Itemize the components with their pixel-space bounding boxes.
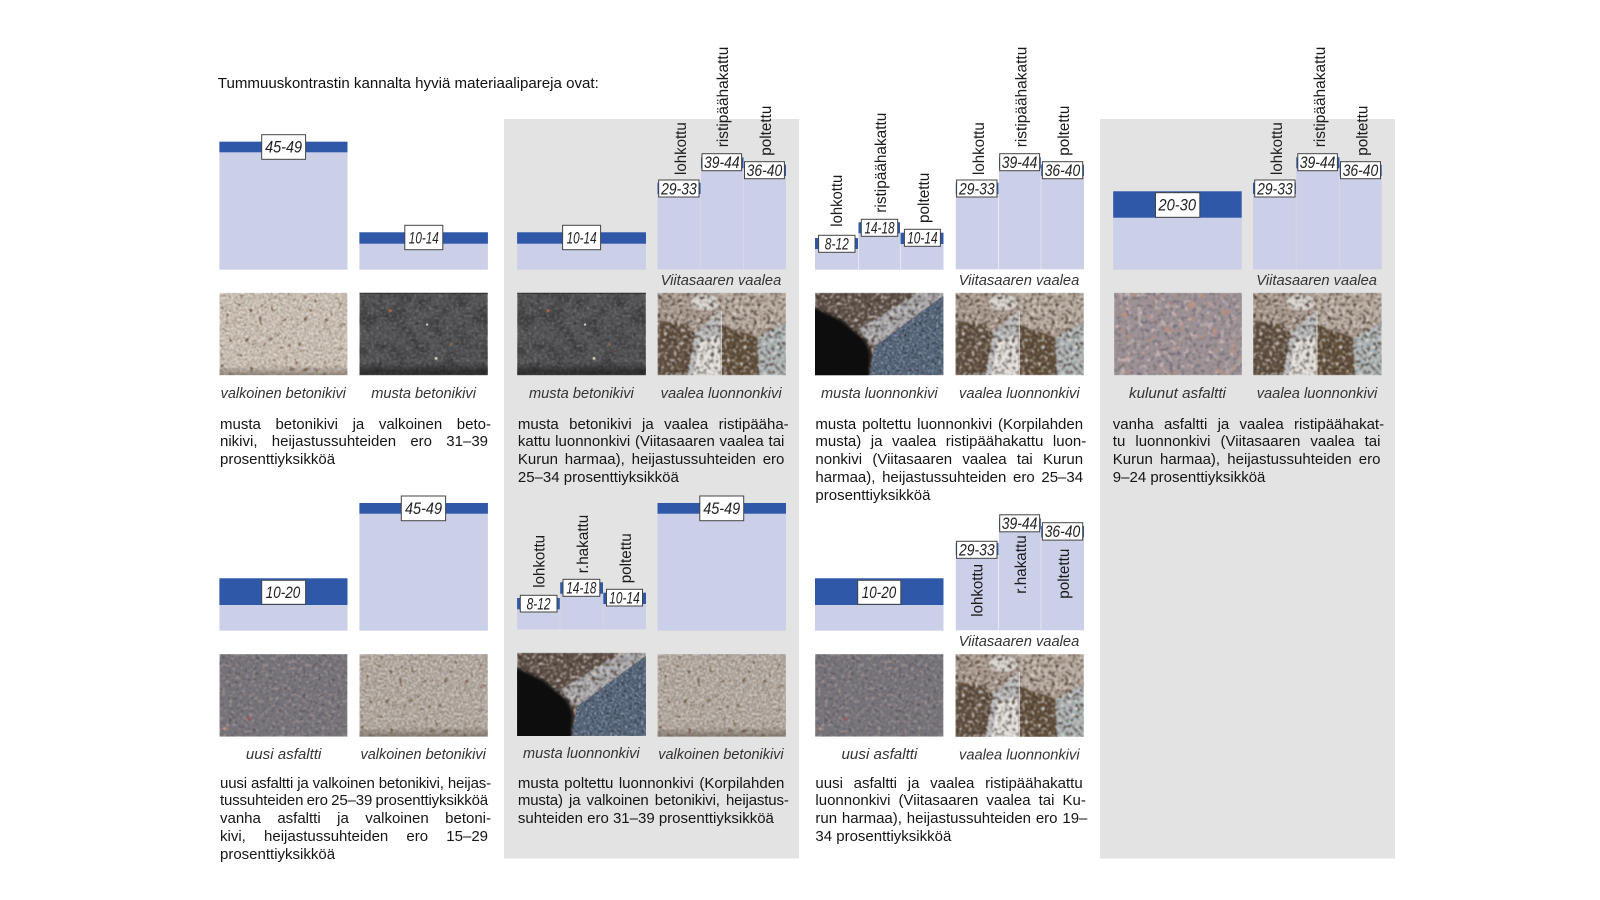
- bar: uusi asfaltti 10-20: 10-20: [266, 584, 301, 602]
- description: harmaa), heijastussuhteiden ero 25–34: [815, 469, 1083, 486]
- bars: Viitasaaren vaalea: 36-40: [1343, 162, 1379, 180]
- label: r.hakattu: r.hakattu: [1013, 535, 1030, 594]
- label: poltettu: poltettu: [1056, 549, 1073, 599]
- description: [220, 774, 496, 866]
- label: lohkottu: lohkottu: [532, 535, 548, 588]
- label: poltettu: poltettu: [1354, 106, 1372, 156]
- bars: musta luonnonkivi: 10-14: [907, 230, 938, 248]
- caption: musta luonnonkivi: musta luonnonkivi: [821, 385, 938, 402]
- description: musta poltettu luonnonkivi (Korpilahden: [815, 416, 1083, 432]
- description: kivi, heijastussuhteiden ero 15–29: [220, 828, 488, 845]
- bars: Viitasaaren vaalea: 39-44: [704, 154, 740, 172]
- bar: uusi asfaltti 10-20: [815, 578, 944, 631]
- caption: musta luonnonkivi: musta luonnonkivi: [523, 745, 640, 762]
- panel: grey column 4 background: [1100, 119, 1395, 858]
- description: suhteiden ero 31–39 prosenttiyksikköä: [518, 810, 774, 827]
- photo: musta luonnonkivi: [809, 293, 944, 382]
- label: lohkottu: lohkottu: [673, 122, 690, 175]
- description: prosenttiyksikköä: [815, 487, 930, 504]
- bars: musta luonnonkivi: 8-12: [825, 236, 849, 254]
- photo: kulunut asfaltti: [1114, 293, 1242, 375]
- caption: vaalea luonnonkivi: vaalea luonnonkivi: [959, 746, 1080, 764]
- bars: Viitasaaren vaalea: 36-40: [1045, 162, 1081, 180]
- bar: valkoinen betonikivi 45-49: [658, 496, 786, 631]
- bar: musta betonikivi 10-14: [517, 225, 646, 270]
- bars: Viitasaaren vaalea: [956, 515, 1084, 630]
- title: Tummuuskontrastin kannalta hyviä materiaalipareja ovat:: [218, 75, 599, 92]
- description: run harmaa), heijastussuhteiden ero 19–: [815, 810, 1087, 827]
- bars: Viitasaaren vaalea: 36-40: [747, 162, 783, 180]
- description: vanha asfaltti ja valkoinen betoni-: [220, 810, 491, 827]
- label: lohkottu: lohkottu: [1269, 122, 1286, 175]
- description: [815, 416, 1091, 508]
- bars: musta luonnonkivi: 8-12: [527, 596, 551, 614]
- panel: musta betonikivi ja valkoinen betonikivi: [219, 135, 496, 490]
- photo: vaalea luonnonkivi: [955, 293, 1084, 375]
- description: [518, 774, 794, 834]
- bar: musta betonikivi 10-14: [359, 225, 488, 270]
- description: uusi asfaltti ja valkoinen betonikivi, heijas-: [220, 774, 491, 792]
- photo: vaalea luonnonkivi: [658, 293, 786, 375]
- description: uusi asfaltti ja vaalea ristipäähakattu: [815, 774, 1083, 792]
- bar: valkoinen betonikivi 45-49: 45-49: [405, 500, 442, 518]
- photo: valkoinen betonikivi: [219, 293, 348, 375]
- description: 34 prosenttiyksikköä: [815, 828, 951, 845]
- panel: musta luonnonkivi ja vaalea luonnonkivi: [809, 47, 1091, 507]
- bars: Viitasaaren vaalea: [956, 154, 1084, 269]
- photo: vaalea luonnonkivi: [1253, 293, 1382, 375]
- panel: kulunut asfaltti ja vaalea luonnonkivi: [1113, 47, 1389, 490]
- label: lohkottu: lohkottu: [829, 175, 846, 227]
- description: musta betonikivi ja valkoinen beto-: [220, 416, 491, 432]
- label: lohkottu: lohkottu: [970, 564, 987, 617]
- bars: musta luonnonkivi: 14-18: [566, 580, 597, 598]
- description: [815, 774, 1091, 850]
- bars: Viitasaaren vaalea: 29-33: [660, 180, 697, 198]
- description: nonkivi (Viitasaaren vaalea tai Kurun: [815, 451, 1083, 468]
- label: poltettu: poltettu: [1056, 106, 1073, 156]
- caption: uusi asfaltti: uusi asfaltti: [246, 746, 322, 763]
- description: kattu luonnonkivi (Viitasaaren vaalea tai: [518, 433, 784, 450]
- label: poltettu: poltettu: [758, 106, 775, 156]
- caption: Viitasaaren vaalea: Viitasaaren vaalea: [959, 633, 1079, 650]
- description: Kurun harmaa), heijastussuhteiden ero: [1113, 451, 1380, 468]
- description: [518, 416, 794, 490]
- caption: valkoinen betonikivi: valkoinen betonikivi: [658, 746, 784, 763]
- label: ristipäähakattu: ristipäähakattu: [715, 47, 732, 147]
- caption: valkoinen betonikivi: valkoinen betonikivi: [221, 385, 347, 402]
- description: musta) ja valkoinen betonikivi, heijastus-: [518, 792, 789, 809]
- description: tussuhteiden ero 25–39 prosenttiyksikköä: [220, 792, 488, 809]
- bar: musta betonikivi 10-14: 10-14: [567, 229, 597, 247]
- photo: uusi asfaltti: [219, 654, 348, 737]
- panel: musta luonnonkivi ja valkoinen betonikivi: [511, 496, 794, 834]
- panel: musta betonikivi ja vaalea luonnonkivi: [517, 47, 794, 490]
- caption: musta betonikivi: musta betonikivi: [529, 385, 634, 402]
- caption: Viitasaaren vaalea: Viitasaaren vaalea: [1256, 272, 1377, 289]
- label: poltettu: poltettu: [916, 173, 933, 223]
- bars: musta luonnonkivi: 14-18: [864, 220, 895, 238]
- label: lohkottu: lohkottu: [971, 122, 988, 175]
- bars: Viitasaaren vaalea: 39-44: [1002, 515, 1037, 533]
- photo: musta betonikivi: [359, 293, 488, 375]
- caption: vaalea luonnonkivi: vaalea luonnonkivi: [661, 385, 782, 402]
- description: luonnonkivi (Viitasaaren vaalea tai Ku-: [815, 792, 1086, 809]
- description: musta poltettu luonnonkivi (Korpilahden: [518, 774, 784, 792]
- description: musta betonikivi ja vaalea ristipääha-: [518, 416, 789, 432]
- bars: Viitasaaren vaalea: 29-33: [958, 180, 995, 198]
- bar: valkoinen betonikivi 45-49: 45-49: [703, 500, 740, 518]
- description: prosenttiyksikköä: [220, 846, 335, 863]
- bars: Viitasaaren vaalea: 29-33: [958, 542, 995, 560]
- photo: musta luonnonkivi: [511, 653, 646, 743]
- photo: valkoinen betonikivi: [359, 654, 488, 737]
- bar: musta betonikivi 10-14: 10-14: [409, 229, 439, 247]
- caption: Viitasaaren vaalea: Viitasaaren vaalea: [959, 272, 1079, 289]
- description: vanha asfaltti ja vaalea ristipäähakat-: [1113, 416, 1384, 432]
- caption: vaalea luonnonkivi: vaalea luonnonkivi: [959, 385, 1080, 402]
- bar: kulunut asfaltti 20-30: [1113, 191, 1242, 270]
- bars: Viitasaaren vaalea: 39-44: [1300, 154, 1335, 172]
- caption: valkoinen betonikivi: valkoinen betonikivi: [360, 746, 486, 763]
- label: ristipäähakattu: ristipäähakattu: [1014, 47, 1031, 147]
- bars: musta luonnonkivi: [517, 579, 646, 629]
- bars: Viitasaaren vaalea: [658, 154, 786, 269]
- panel: grey column 2 background: [504, 119, 799, 858]
- caption: musta betonikivi: musta betonikivi: [371, 385, 477, 402]
- panel: uusi asfaltti ja vaalea luonnonkivi: [815, 515, 1091, 850]
- bar: kulunut asfaltti 20-30: 20-30: [1158, 197, 1197, 215]
- photo: vaalea luonnonkivi: [955, 654, 1084, 737]
- photo: uusi asfaltti: [815, 654, 944, 737]
- bar: valkoinen betonikivi 45-49: [359, 496, 488, 631]
- description: Kurun harmaa), heijastussuhteiden ero: [518, 451, 784, 468]
- description: musta) ja vaalea ristipäähakattu luon-: [815, 433, 1086, 450]
- bars: Viitasaaren vaalea: 39-44: [1002, 154, 1037, 172]
- bars: Viitasaaren vaalea: 29-33: [1256, 180, 1293, 198]
- bars: musta luonnonkivi: [815, 219, 944, 270]
- photo: valkoinen betonikivi: [658, 654, 786, 737]
- caption: kulunut asfaltti: kulunut asfaltti: [1129, 385, 1227, 402]
- bars: Viitasaaren vaalea: [1253, 154, 1382, 269]
- label: r.hakattu: r.hakattu: [575, 515, 592, 573]
- description: nikivi, heijastussuhteiden ero 31–39: [220, 433, 488, 450]
- description: 25–34 prosenttiyksikköä: [518, 469, 679, 486]
- label: poltettu: poltettu: [618, 533, 635, 583]
- bars: Viitasaaren vaalea: 36-40: [1045, 523, 1081, 541]
- description: prosenttiyksikköä: [220, 451, 335, 468]
- caption: uusi asfaltti: uusi asfaltti: [842, 746, 918, 763]
- bar: valkoinen betonikivi 45-49: [219, 135, 348, 270]
- label: ristipäähakattu: ristipäähakattu: [1312, 47, 1329, 147]
- description: [220, 416, 496, 490]
- bar: valkoinen betonikivi 45-49: 45-49: [265, 139, 302, 157]
- caption: vaalea luonnonkivi: vaalea luonnonkivi: [1257, 385, 1378, 402]
- bar: uusi asfaltti 10-20: 10-20: [862, 584, 897, 602]
- photo: musta betonikivi: [517, 293, 646, 375]
- label: ristipäähakattu: ristipäähakattu: [873, 113, 890, 213]
- caption: Viitasaaren vaalea: Viitasaaren vaalea: [661, 272, 781, 289]
- bar: uusi asfaltti 10-20: [219, 578, 348, 631]
- description: 9–24 prosenttiyksikköä: [1113, 469, 1265, 486]
- description: tu luonnonkivi (Viitasaaren vaalea tai: [1113, 433, 1380, 450]
- bars: musta luonnonkivi: 10-14: [609, 590, 640, 608]
- panel: uusi/vanha asfaltti ja valkoinen betonikivi: [219, 496, 496, 866]
- description: [1113, 416, 1389, 490]
